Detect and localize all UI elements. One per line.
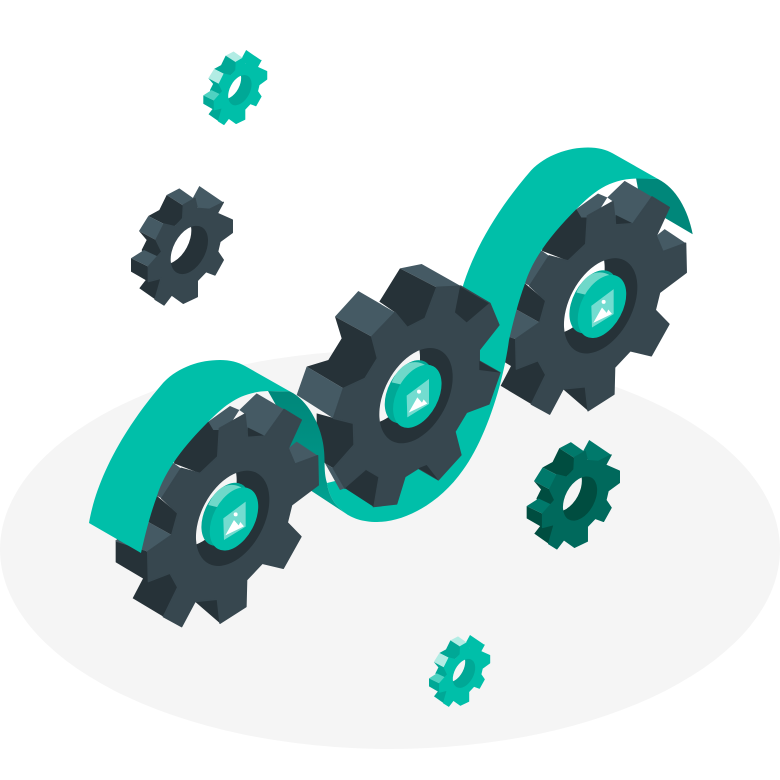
main teal ribbon [327, 148, 658, 522]
small dark green gear [527, 440, 619, 549]
left gear: front face and image badge [148, 409, 318, 627]
right gear: front face and image badge [516, 197, 686, 414]
left teal ribbon [89, 360, 290, 553]
ribbon tail between left and middle gears [268, 391, 345, 513]
small teal gear top [203, 50, 267, 125]
small dark gear [131, 186, 232, 305]
middle gear [297, 264, 500, 507]
floor ellipse [0, 350, 780, 749]
small teal gear bottom [429, 635, 490, 706]
left gear: back teeth [116, 393, 318, 623]
ribbon tail behind right gear [636, 178, 693, 234]
right gear: back teeth [484, 181, 686, 411]
